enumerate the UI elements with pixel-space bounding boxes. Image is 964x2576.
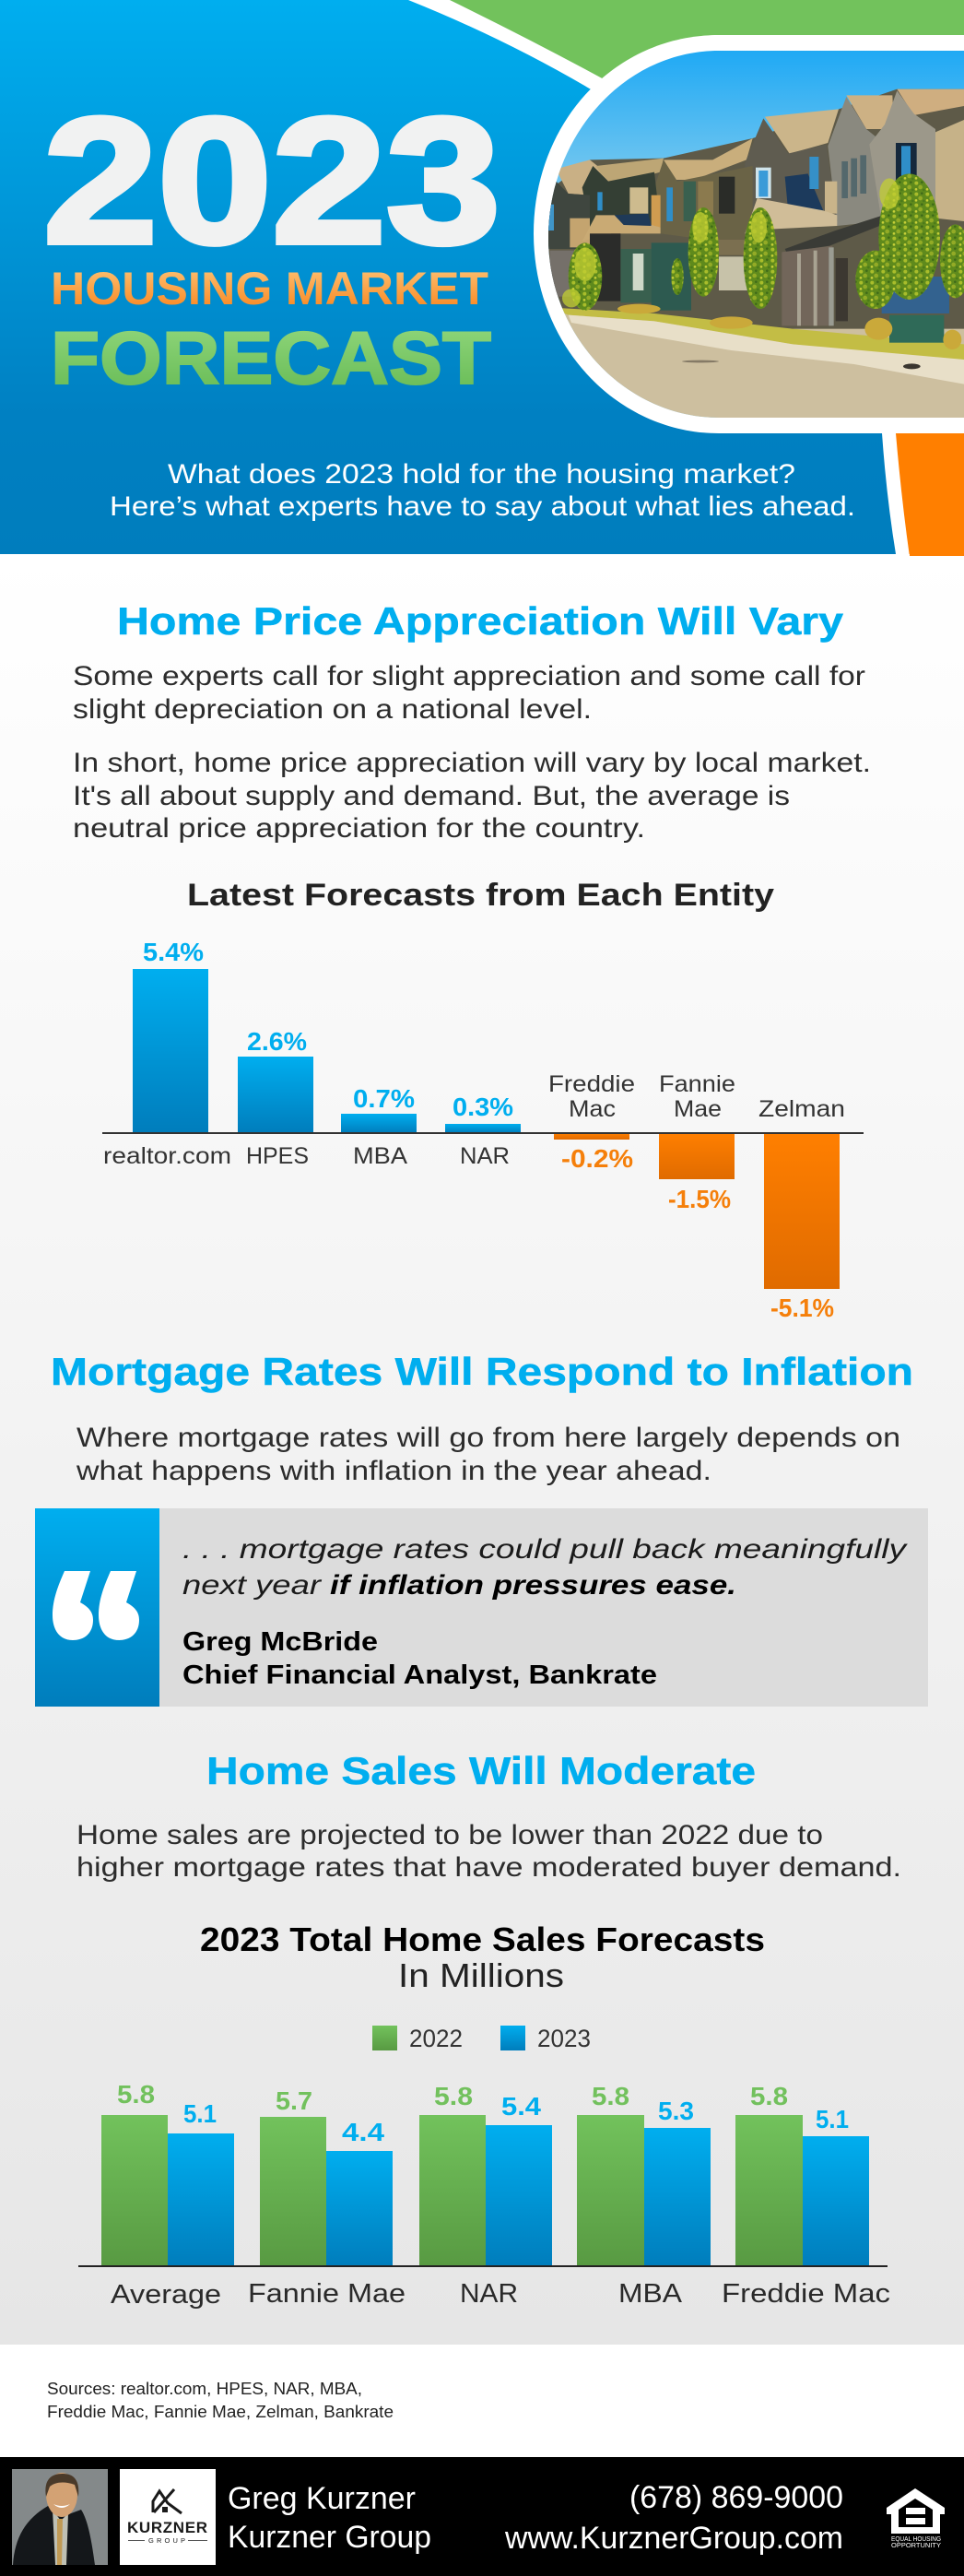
text block: price detail: It's all about supply and demand. But, the average is xyxy=(73,781,790,811)
bars: negative forecasts xyxy=(554,1133,840,1289)
heading: home sales: Home Sales Will Moderate xyxy=(206,1749,756,1792)
chart title: total home sales forecasts xyxy=(200,1920,765,1994)
text block: price intro xyxy=(73,661,865,725)
quote text: if inflation pressures ease. xyxy=(330,1570,736,1601)
text block: mortgage intro: what happens with inflation in the year ahead. xyxy=(76,1456,711,1486)
legend: 2023 xyxy=(537,2025,591,2052)
text block: price detail: In short, home price appreciation will vary by local market. xyxy=(73,748,871,778)
agent portrait xyxy=(12,2469,108,2565)
heading: mortgage rates: Mortgage Rates Will Respond to Inflation xyxy=(51,1350,913,1393)
title: forecast: FORECAST xyxy=(51,317,491,400)
callout: quote panel xyxy=(35,1508,928,1707)
hero background: blue panel xyxy=(0,0,896,554)
value labels: 2023 xyxy=(183,2092,849,2146)
agent name: Kurzner Group xyxy=(228,2520,431,2555)
quote text: next year xyxy=(182,1570,322,1601)
hero accent: green shape xyxy=(450,0,964,80)
category labels: Fannie Mae xyxy=(248,2279,406,2309)
quote attribution: Chief Financial Analyst, Bankrate xyxy=(182,1660,657,1690)
agent name xyxy=(228,2481,431,2555)
value labels: 2022: 5.7 xyxy=(276,2086,312,2115)
value labels: 2022: 5.8 xyxy=(750,2082,788,2110)
category labels: HPES xyxy=(246,1143,309,1169)
hero accent: orange shape xyxy=(896,433,964,557)
value labels: 2023: 4.4 xyxy=(342,2118,384,2146)
value labels: 0.3% xyxy=(453,1093,513,1121)
category labels: Fannie xyxy=(659,1071,735,1097)
bars: 2022 xyxy=(101,2115,803,2266)
value labels: 2023: 5.1 xyxy=(183,2099,217,2128)
category labels: Zelman xyxy=(758,1096,845,1122)
heading: home price appreciation: Home Price Appreciation Will Vary xyxy=(117,599,844,643)
footer bar xyxy=(0,2457,964,2576)
chart title: latest forecasts: Latest Forecasts from Each Entity xyxy=(187,878,774,913)
value labels: 2022: 5.8 xyxy=(592,2082,629,2110)
text block: price intro: slight depreciation on a national level. xyxy=(73,694,592,725)
bar chart: latest forecasts xyxy=(102,938,864,1322)
text block: sources: Freddie Mac, Fannie Mae, Zelman, Bankrate xyxy=(47,2403,394,2421)
value labels: -0.2% xyxy=(561,1144,633,1173)
hero subtitle xyxy=(110,459,855,522)
icon: equal housing opportunity: OPPORTUNITY xyxy=(891,2541,941,2549)
category labels xyxy=(103,1071,845,1169)
content background xyxy=(0,554,964,2345)
legend xyxy=(372,2025,591,2052)
orange accent lower edge xyxy=(910,554,964,556)
category labels: Freddie Mac xyxy=(722,2279,890,2309)
category labels: Mac xyxy=(569,1096,616,1122)
contact details: www.KurznerGroup.com xyxy=(504,2521,843,2556)
text block: sources xyxy=(47,2380,394,2421)
bars: 2023 xyxy=(168,2125,869,2266)
icon: quotation marks xyxy=(53,1571,139,1640)
text block: home sales intro: Home sales are projected to be lower than 2022 due to xyxy=(76,1820,823,1850)
contact details: (678) 869-9000 xyxy=(629,2480,843,2515)
value labels: 2023: 5.1 xyxy=(816,2105,849,2133)
value labels: -1.5% xyxy=(668,1185,731,1213)
contact details xyxy=(504,2480,843,2556)
title: housing market: HOUSING MARKET xyxy=(51,263,488,314)
bars: positive forecasts xyxy=(133,969,521,1133)
company logo xyxy=(120,2469,216,2565)
icon: equal housing opportunity xyxy=(887,2488,945,2549)
category labels xyxy=(111,2279,890,2310)
text block: price intro: Some experts call for slight appreciation and some call for xyxy=(73,661,865,691)
category labels: NAR xyxy=(460,2279,518,2309)
value labels: 2023: 5.3 xyxy=(658,2097,694,2125)
company logo: KURZNER xyxy=(127,2519,207,2536)
value labels: 2022: 5.8 xyxy=(117,2080,155,2109)
category labels: MBA xyxy=(353,1143,407,1169)
value labels: -5.1% xyxy=(770,1294,834,1322)
chart title: total home sales forecasts: In Millions xyxy=(398,1956,564,1994)
quote attribution xyxy=(182,1627,657,1690)
category labels: Mae xyxy=(674,1096,722,1122)
value labels: 5.4% xyxy=(143,938,204,966)
value labels: 2022 xyxy=(117,2080,788,2115)
value labels: 2023: 5.4 xyxy=(501,2092,541,2121)
category labels: MBA xyxy=(618,2279,683,2309)
chart title: total home sales forecasts: 2023 Total Home Sales Forecasts xyxy=(200,1920,765,1958)
value labels: 0.7% xyxy=(353,1084,415,1113)
bar chart: total home sales xyxy=(78,2080,890,2310)
value labels xyxy=(143,938,834,1322)
agent name: Greg Kurzner xyxy=(228,2481,416,2516)
text block: mortgage intro: Where mortgage rates will go from here largely depends on xyxy=(76,1423,900,1453)
hero subtitle: What does 2023 hold for the housing market? xyxy=(168,459,795,490)
hero photo: row of suburban houses xyxy=(548,51,964,418)
category labels: realtor.com xyxy=(103,1143,231,1169)
category labels: Average xyxy=(111,2280,221,2310)
company logo: GROUP xyxy=(148,2536,185,2545)
category labels: Freddie xyxy=(548,1071,635,1097)
icon: equal housing opportunity: EQUAL HOUSING xyxy=(891,2535,941,2543)
text block: price detail: neutral price appreciation for the country. xyxy=(73,813,645,844)
category labels: NAR xyxy=(460,1143,510,1169)
quote text: . . . mortgage rates could pull back meaningfully xyxy=(182,1534,908,1565)
hero subtitle: Here’s what experts have to say about what lies ahead. xyxy=(110,491,855,522)
text block: home sales intro xyxy=(76,1820,901,1883)
value labels: 2.6% xyxy=(247,1027,307,1056)
text block: mortgage intro xyxy=(76,1423,900,1486)
quote text xyxy=(182,1534,908,1601)
icon: roof mark xyxy=(153,2489,182,2513)
text block: sources: Sources: realtor.com, HPES, NAR, MBA, xyxy=(47,2380,362,2398)
value labels: 2022: 5.8 xyxy=(434,2082,473,2110)
title: 2023: 2023 xyxy=(43,81,500,281)
text block: price detail xyxy=(73,748,871,844)
text block: home sales intro: higher mortgage rates that have moderated buyer demand. xyxy=(76,1852,901,1883)
hero photo white frame xyxy=(534,35,964,433)
quote attribution: Greg McBride xyxy=(182,1627,378,1657)
legend: 2022 xyxy=(409,2025,463,2052)
